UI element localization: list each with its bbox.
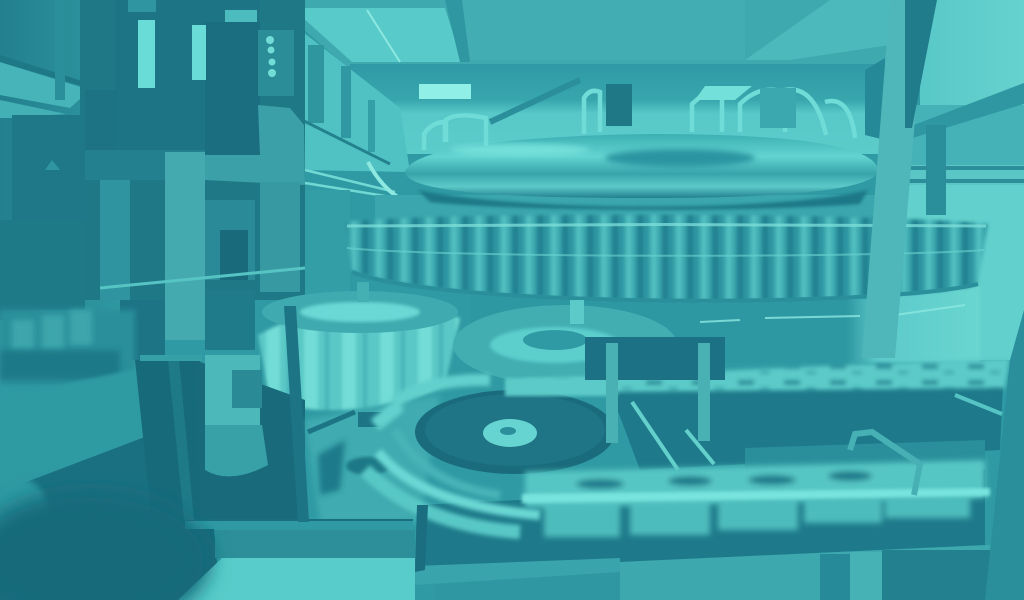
valve on carousel bbox=[606, 84, 632, 126]
right wall bbox=[905, 0, 1024, 360]
top of bottle ring bbox=[375, 195, 885, 225]
diagonal rods bbox=[632, 395, 1002, 470]
guard plate bbox=[585, 337, 725, 443]
left infeed bottles and tank bbox=[0, 310, 220, 600]
valve cluster bbox=[760, 88, 796, 128]
base frame bbox=[185, 519, 415, 558]
left filling machine bbox=[0, 0, 305, 360]
left wall bands bbox=[0, 0, 95, 118]
rear columns bbox=[865, 58, 885, 140]
vertical steel column bbox=[862, 0, 937, 358]
spinning blur on lower machine bbox=[305, 395, 440, 522]
upper conveyor bbox=[505, 358, 1010, 396]
handle rail bbox=[850, 432, 920, 495]
vertical poles bbox=[140, 306, 309, 522]
bottom conveyor base bbox=[415, 470, 990, 600]
back wall bbox=[350, 64, 880, 154]
band ripple highlights bbox=[700, 305, 965, 322]
blurred turntable bottle streaks bbox=[365, 380, 540, 532]
roof plate bbox=[695, 86, 752, 100]
conveyor end face bbox=[415, 505, 428, 572]
dark corner wash bbox=[0, 490, 210, 600]
rear conveyor rail bbox=[745, 440, 985, 470]
ceiling bbox=[270, 0, 900, 70]
main rotary bottle ring bbox=[345, 215, 988, 301]
bottom conveyor light strip bbox=[522, 488, 990, 503]
dark drive and rod bbox=[308, 412, 390, 495]
carousel top pipes bbox=[424, 90, 855, 150]
diagonal beam bbox=[490, 80, 580, 122]
floor bbox=[178, 558, 415, 600]
second rotary star bbox=[453, 300, 677, 385]
bottom conveyor blurred bottles bbox=[525, 460, 985, 537]
right foreground post bbox=[985, 310, 1024, 600]
shadow below disc bbox=[418, 190, 868, 210]
turntable disc bbox=[415, 390, 615, 474]
side wall with windows bbox=[262, 0, 415, 295]
dark housing under upper conveyor bbox=[610, 385, 1003, 470]
lower machine interior bbox=[195, 355, 305, 525]
lower rotary bottle band bbox=[470, 285, 980, 363]
ceiling light bbox=[419, 84, 471, 99]
top carousel disc bbox=[405, 134, 878, 198]
small rotary star with bottles bbox=[258, 282, 460, 410]
left wall bbox=[0, 0, 120, 320]
